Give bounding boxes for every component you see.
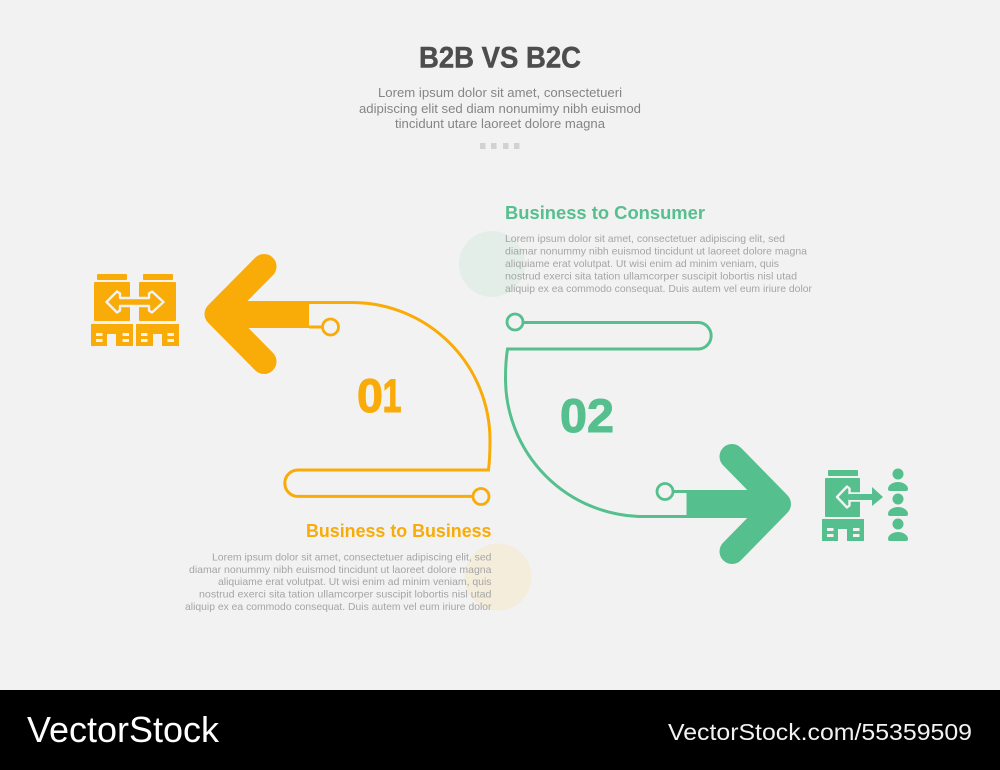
body text: business to business: aliquiame erat volutpat. Ut wisi enim ad minim veniam, quis: [218, 576, 492, 588]
panel: step 01 diagram: [217, 266, 490, 504]
title divider dots: [480, 143, 520, 149]
subtitle text block: Lorem ipsum dolor sit amet, consectetueri: [378, 85, 622, 100]
curved connector line: green: [505, 322, 711, 516]
decorative circle: green: [459, 231, 525, 297]
body text: business to consumer: aliquip ex ea commodo consequat. Duis autem vel eum iriure dolor: [505, 283, 812, 295]
subtitle text block: adipiscing elit sed diam nonumimy nibh euismod: [359, 101, 641, 116]
body text: business to business: [185, 552, 492, 613]
body text: business to business: diamar nonummy nibh euismod tincidunt ut laoreet dolore magna: [189, 564, 492, 576]
heading: business to consumer: Business to Consumer: [505, 202, 705, 223]
connector node: upper: [309, 319, 338, 335]
panel: business to business text: [185, 520, 532, 613]
body text: business to business: aliquip ex ea commodo consequat. Duis autem vel eum iriure dolor: [185, 601, 492, 613]
curved connector line: orange: [285, 302, 490, 496]
panel: step 02 diagram: [505, 314, 778, 552]
body text: business to consumer: [505, 233, 812, 295]
title: B2B VS B2C: [419, 42, 581, 74]
connector node: lower: [657, 484, 687, 500]
arrow: orange pointing left: [217, 266, 309, 362]
footer logo text: VectorStock: [27, 709, 220, 750]
number 01: 0: [357, 369, 383, 422]
body text: business to consumer: nostrud exerci sita tation ullamcorper suscipit lobortis nisl utad: [505, 270, 797, 282]
number 01: [357, 369, 402, 422]
body text: business to consumer: diamar nonummy nibh euismod tincidunt ut laoreet dolore magna: [505, 246, 807, 258]
body text: business to consumer: aliquiame erat volutpat. Ut wisi enim ad minim veniam, quis: [505, 258, 779, 270]
number 02: 02: [560, 389, 614, 442]
body text: business to consumer: Lorem ipsum dolor sit amet, consectetuer adipiscing elit, sed: [505, 233, 785, 245]
connector node: lower: [473, 488, 489, 504]
panel: business to consumer text: [459, 202, 812, 297]
body text: business to business: nostrud exerci sita tation ullamcorper suscipit lobortis nisl utad: [199, 588, 492, 600]
arrow: green pointing right: [686, 456, 778, 552]
number 01: 1: [382, 369, 402, 422]
icon: pallet to consumers: [822, 468, 908, 541]
subtitle text block: tincidunt utare laoreet dolore magna: [395, 116, 606, 131]
footer bar: [0, 690, 1000, 770]
connector node: upper: [507, 314, 523, 330]
decorative circle: orange: [464, 544, 532, 610]
footer image id: VectorStock.com/55359509: [668, 719, 972, 745]
body text: business to business: Lorem ipsum dolor sit amet, consectetuer adipiscing elit, sed: [212, 552, 492, 564]
subtitle text block: [359, 85, 641, 131]
heading: business to business: Business to Business: [306, 520, 492, 541]
icon: pallets with exchange arrow: [91, 274, 179, 346]
